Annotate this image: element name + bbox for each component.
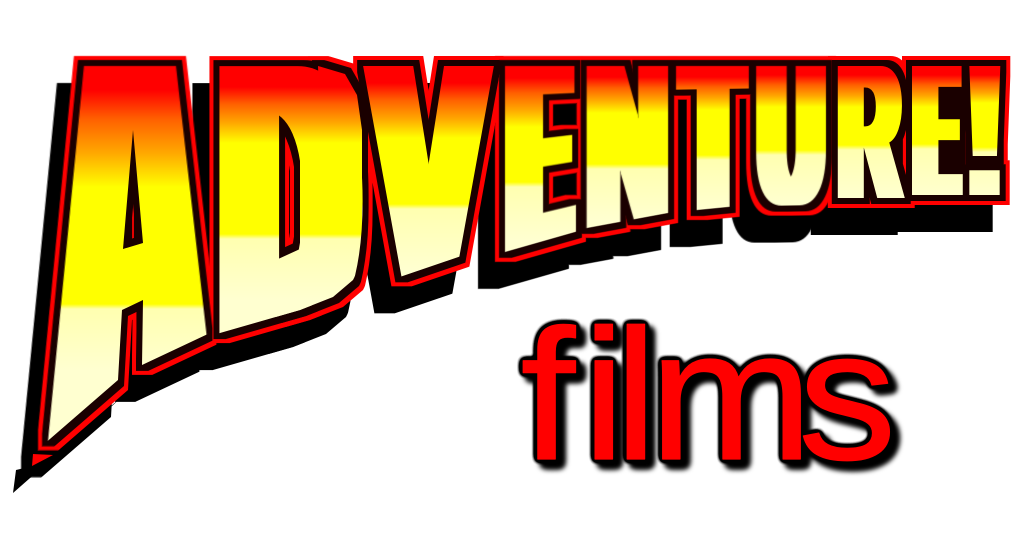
- letter U: U: [760, 23, 828, 248]
- letter D: [192, 56, 466, 370]
- subtitle: films: films: [520, 290, 897, 499]
- letter V: V: [375, 0, 483, 360]
- letter E: E: [518, 9, 629, 317]
- letter T: T: [689, 20, 773, 260]
- letter R: R: [839, 26, 899, 239]
- sharp tip of the A shadow and outline: [13, 402, 117, 493]
- letter E: E: [917, 26, 956, 236]
- letter N: N: [590, 16, 733, 285]
- exclamation mark: !: [949, 25, 1021, 235]
